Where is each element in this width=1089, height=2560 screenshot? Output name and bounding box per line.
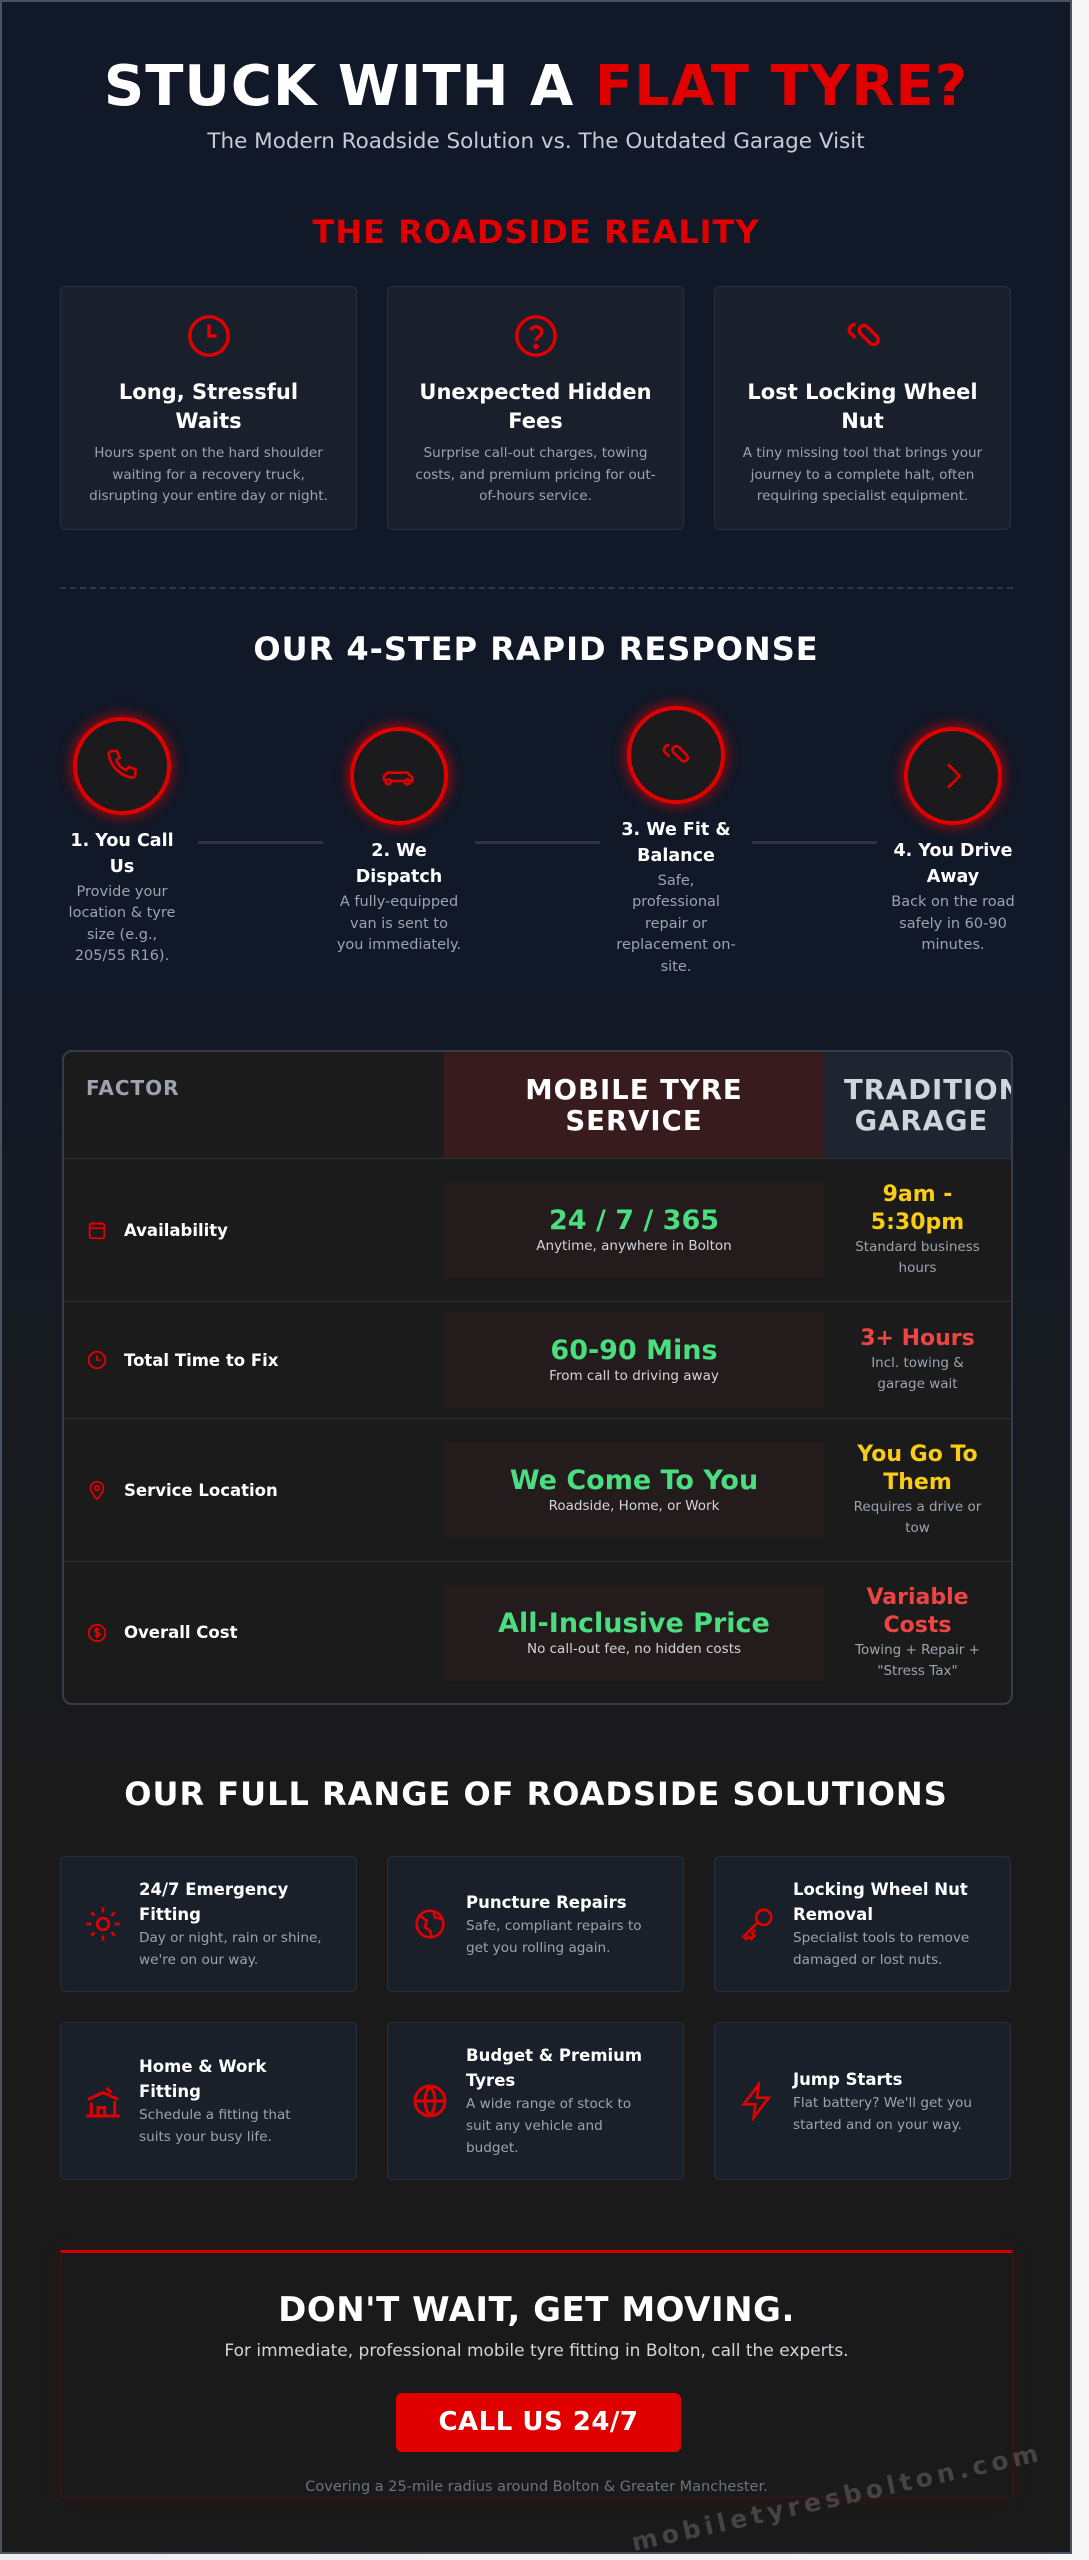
step 2: A fully-equipped: [340, 894, 458, 910]
step 3: professional: [632, 894, 720, 910]
steps flow: [62, 696, 1015, 975]
solution: locking nut: Removal: [793, 1905, 873, 1924]
solution: tyres: Budget & Premium: [466, 2046, 642, 2065]
icon: clock: [188, 315, 230, 357]
step 3: 3. We Fit &: [621, 820, 731, 840]
step 2: Dispatch: [356, 867, 442, 887]
row: time: Total Time to Fix: [124, 1350, 278, 1370]
row: location: Requires a drive or: [854, 1499, 981, 1515]
solution: emergency: [60, 1856, 357, 1992]
row: cost: No call-out fee, no hidden costs: [527, 1640, 741, 1656]
solution: tyres: A wide range of stock to: [466, 2096, 631, 2112]
solution: puncture: Safe, compliant repairs to: [466, 1918, 642, 1934]
step 1: size (e.g.,: [87, 926, 157, 942]
step 4: minutes.: [921, 937, 985, 953]
solution: home & work: [60, 2022, 357, 2180]
row: availability: Anytime, anywhere in Bolton: [536, 1238, 732, 1254]
table header: [86, 1052, 1011, 1158]
panel: hidden fees: [387, 286, 684, 530]
table header: SERVICE: [565, 1105, 703, 1137]
step 1: 205/55 R16).: [75, 948, 169, 964]
solution: jump starts: [714, 2022, 1011, 2180]
solution: puncture: Puncture Repairs: [466, 1892, 627, 1912]
panel: long waits: [60, 286, 357, 530]
solution: puncture: get you rolling again.: [466, 1940, 610, 1956]
solution: tyres: Tyres: [466, 2071, 515, 2090]
solution: tyres: budget.: [466, 2140, 519, 2156]
row: location: tow: [905, 1520, 930, 1536]
heading: solutions: OUR FULL RANGE OF ROADSIDE SOLUTIONS: [124, 1775, 948, 1813]
subtitle: The Modern Roadside Solution vs. The Outdated Garage Visit: [207, 129, 865, 154]
call to action panel: [60, 2250, 1013, 2497]
row: location: Service Location: [124, 1480, 278, 1500]
row: cost: [64, 1561, 1011, 1703]
step 4: Away: [927, 867, 979, 887]
row: time: garage wait: [877, 1376, 958, 1392]
row: time: [64, 1301, 1011, 1418]
row: location: Roadside, Home, or Work: [549, 1498, 719, 1514]
table header: FACTOR: [86, 1076, 180, 1100]
row: availability: Standard business hours: [855, 1239, 980, 1276]
panel: long waits: waiting for a recovery truck,: [112, 466, 305, 482]
solution: locking nut: Locking Wheel Nut: [793, 1880, 968, 1899]
panel: locking nut: A tiny missing tool that brings your: [743, 445, 982, 461]
row: location: We Come To You: [510, 1465, 758, 1496]
panel: hidden fees: Unexpected Hidden: [419, 380, 652, 404]
row: location: You Go To Them: [857, 1442, 978, 1495]
row: cost: Overall Cost: [124, 1623, 237, 1642]
step 3: Safe,: [658, 873, 694, 889]
panel: locking nut: Lost Locking Wheel: [747, 380, 978, 404]
panel: hidden fees: Fees: [508, 409, 563, 433]
solution: emergency: Day or night, rain or shine,: [139, 1930, 322, 1946]
panel: hidden fees: of-hours service.: [479, 488, 592, 504]
step 4: safely in 60-90: [899, 916, 1007, 932]
solution: puncture: [387, 1856, 684, 1992]
step 4: [891, 716, 1015, 953]
row: cost: Variable Costs: [866, 1584, 969, 1638]
title: STUCK WITH A FLAT TYRE?: [104, 54, 968, 119]
step 3: repair or: [645, 916, 707, 932]
panel: long waits: Hours spent on the hard shoulder: [94, 445, 323, 461]
row: cost: All-Inclusive Price: [498, 1608, 770, 1638]
solution: locking nut: Specialist tools to remove: [793, 1930, 969, 1946]
step 2: van is sent to: [350, 916, 448, 932]
solution: jump starts: Jump Starts: [793, 2070, 902, 2088]
solution: jump starts: Flat battery? We'll get you: [793, 2094, 972, 2110]
solution: home & work: Fitting: [139, 2082, 201, 2101]
step 2: [337, 716, 461, 953]
table header: MOBILE TYRE: [525, 1074, 743, 1106]
row: availability: 9am - 5:30pm: [871, 1182, 964, 1235]
button: CALL US 24/7: [438, 2407, 639, 2437]
cta heading: DON'T WAIT, GET MOVING.: [278, 2290, 795, 2330]
icon: question: [515, 315, 557, 357]
row: time: From call to driving away: [549, 1368, 719, 1384]
solution: jump starts: started and on your way.: [793, 2116, 962, 2132]
row: time: Incl. towing &: [871, 1355, 964, 1371]
step 4: Back on the road: [891, 894, 1015, 910]
panel: locking nut: Nut: [841, 409, 884, 433]
solution: home & work: Schedule a fitting that: [139, 2107, 291, 2123]
row: time: 60-90 Mins: [550, 1335, 718, 1366]
step 3: site.: [661, 959, 691, 975]
solution: locking nut: [714, 1856, 1011, 1992]
cta text: For immediate, professional mobile tyre fitting in Bolton, call the experts.: [224, 2341, 849, 2361]
panel: hidden fees: Surprise call-out charges, towing: [424, 445, 647, 461]
step 3: replacement on-: [616, 937, 736, 953]
step 3: Balance: [637, 846, 715, 866]
step 4: 4. You Drive: [894, 841, 1012, 861]
step 1: 1. You Call: [70, 830, 174, 850]
step 1: Us: [110, 856, 134, 876]
watermark: mobiletyresbolton.com: [629, 2438, 1045, 2554]
step 2: you immediately.: [337, 937, 461, 953]
row: availability: 24 / 7 / 365: [549, 1205, 719, 1236]
panel: locking nut: requiring specialist equipment.: [757, 488, 968, 504]
table header: GARAGE: [855, 1105, 988, 1137]
comparison table: [62, 1050, 1013, 1705]
icon: wrench: [848, 322, 880, 346]
step 1: [62, 706, 182, 964]
heading: the roadside reality: THE ROADSIDE REALITY: [312, 213, 760, 251]
step 2: 2. We: [371, 841, 427, 861]
row: time: 3+ Hours: [860, 1326, 975, 1351]
row: availability: Availability: [124, 1220, 228, 1240]
solution: home & work: Home & Work: [139, 2057, 266, 2076]
row: cost: Towing + Repair + "Stress Tax": [855, 1642, 980, 1678]
solution: emergency: we're on our way.: [139, 1952, 258, 1968]
panel: locking nut: [714, 286, 1011, 530]
row: availability: [64, 1158, 1011, 1301]
panel: long waits: Long, Stressful: [119, 380, 298, 404]
panel: hidden fees: costs, and premium pricing for out-: [415, 466, 656, 482]
coverage note: Covering a 25-mile radius around Bolton & Greater Manchester.: [305, 2479, 768, 2495]
panel: locking nut: journey to a complete halt, often: [751, 466, 974, 482]
panel: long waits: disrupting your entire day or night.: [89, 488, 328, 504]
button: [396, 2393, 681, 2452]
solution: tyres: [387, 2022, 684, 2180]
solution: locking nut: damaged or lost nuts.: [793, 1952, 942, 1968]
row: location: [64, 1418, 1011, 1561]
solution: home & work: suits your busy life.: [139, 2129, 272, 2145]
heading: 4-step: OUR 4-STEP RAPID RESPONSE: [253, 630, 819, 668]
panel: long waits: Waits: [175, 409, 242, 433]
step 1: Provide your: [77, 884, 167, 900]
step 3: [616, 696, 736, 975]
solution: tyres: suit any vehicle and: [466, 2118, 603, 2134]
step 1: location & tyre: [69, 905, 175, 921]
solution: emergency: 24/7 Emergency: [139, 1880, 288, 1899]
solution: emergency: Fitting: [139, 1905, 201, 1924]
